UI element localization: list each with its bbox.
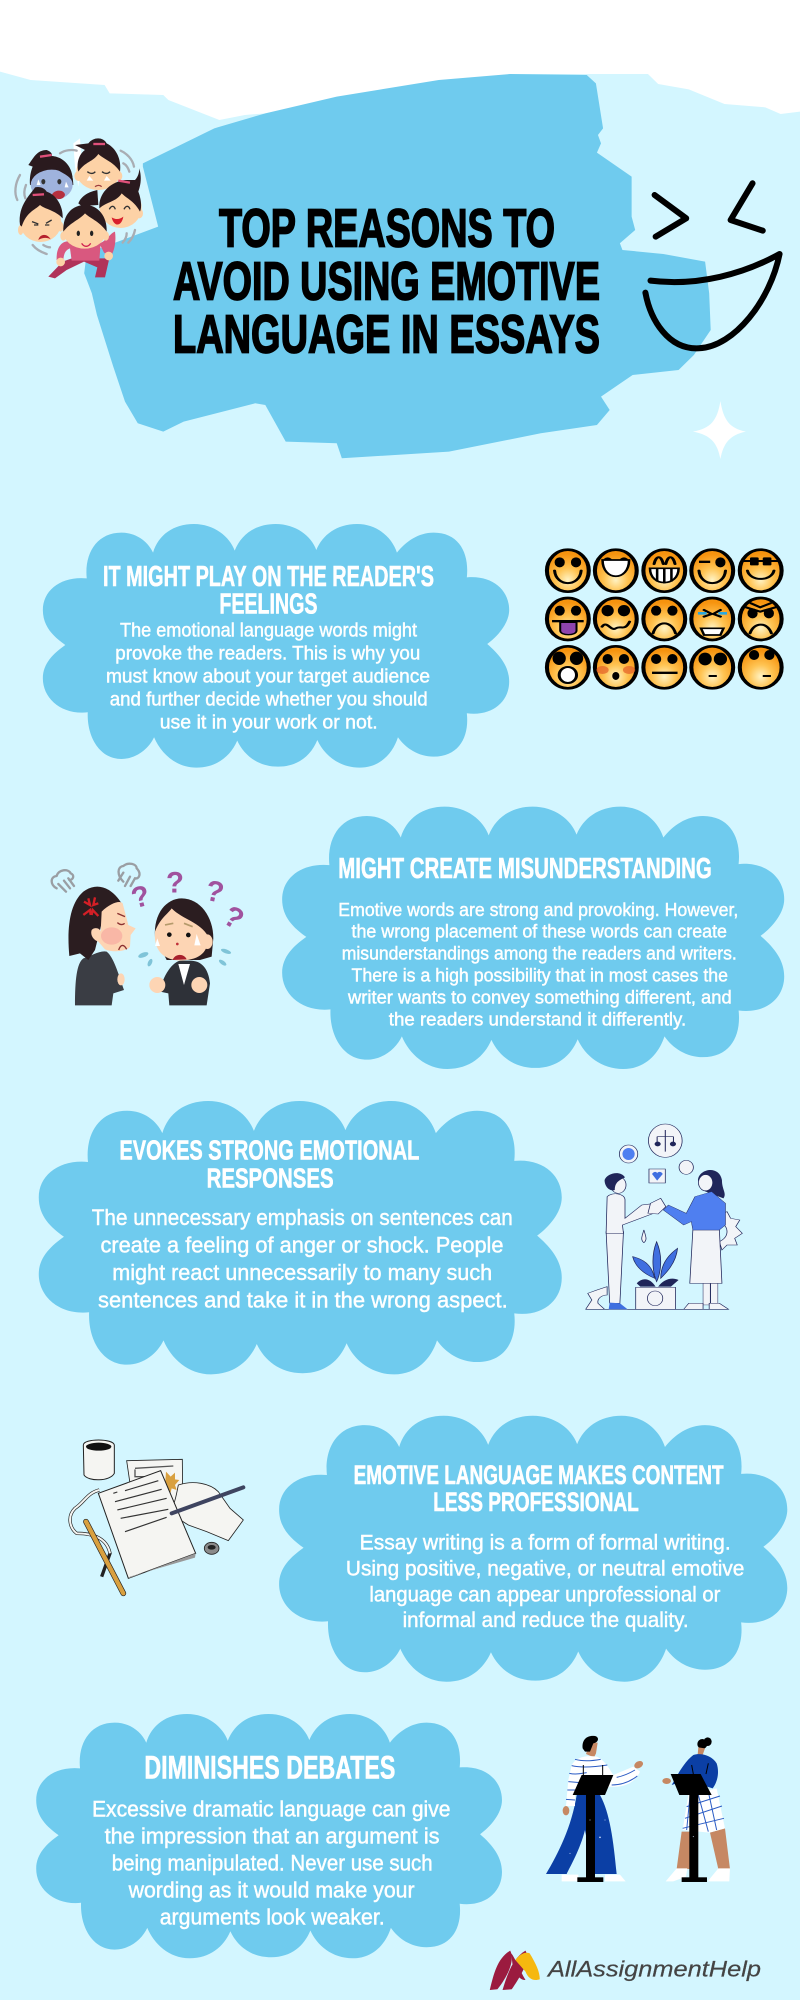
- heading: [119, 1134, 419, 1193]
- ring: [204, 1542, 219, 1554]
- icon: angry woman and worried woman: [52, 864, 250, 1005]
- icon: white sparkle: [693, 401, 746, 459]
- top woman: [76, 153, 120, 190]
- body text: sentences and take it in the wrong aspect.: [98, 1288, 508, 1313]
- panel: emotive language makes content less professional: [279, 1416, 787, 1682]
- body text: [92, 1797, 450, 1930]
- centre woman: [48, 258, 109, 278]
- heading: DIMINISHES DEBATES: [144, 1749, 395, 1785]
- heading: [354, 1460, 724, 1517]
- question marks: ?: [128, 879, 153, 915]
- scale icon: [648, 1124, 682, 1157]
- body text: the wrong placement of these words can create: [352, 921, 727, 942]
- pen: [172, 1487, 243, 1513]
- title: AVOID USING EMOTIVE: [173, 252, 600, 312]
- body text: the readers understand it differently.: [389, 1008, 686, 1029]
- left woman: [20, 203, 61, 242]
- cloud background: [39, 1101, 562, 1374]
- logo mark: [490, 1951, 540, 1990]
- strap: [70, 1490, 110, 1577]
- body text: provoke the readers. This is why you: [115, 643, 420, 665]
- cup: [83, 1440, 114, 1480]
- body text: wording as it would make your: [128, 1878, 415, 1903]
- panel: diminishes debates: [36, 1714, 502, 1958]
- panel: might create misunderstanding: [282, 807, 784, 1069]
- cloud background: [282, 807, 784, 1069]
- title: [173, 198, 600, 364]
- body text: misunderstandings among the readers and writers.: [342, 943, 737, 964]
- cloud background: [36, 1714, 502, 1958]
- body text: [92, 1205, 513, 1313]
- man: [606, 1232, 623, 1303]
- glove hand: [170, 1483, 243, 1541]
- angry woman: [75, 951, 124, 1005]
- pencil: [86, 1522, 123, 1593]
- question marks: ?: [217, 899, 250, 937]
- man: [586, 1743, 598, 1757]
- woman: [698, 1170, 725, 1198]
- panel: it might play on the reader's feelings: [43, 524, 509, 768]
- body text: Emotive words are strong and provoking. However,: [338, 899, 738, 920]
- body text: use it in your work or not.: [160, 712, 378, 734]
- icon: grid of emoticon faces: [547, 550, 782, 688]
- plant: [636, 1287, 676, 1309]
- body text: [346, 1532, 744, 1632]
- body text: informal and reduce the quality.: [403, 1609, 689, 1632]
- heading: EVOKES STRONG EMOTIONAL: [119, 1134, 419, 1165]
- panel: evokes strong emotional responses: [39, 1101, 562, 1374]
- body text: Excessive dramatic language can give: [92, 1797, 450, 1822]
- cloud background: [43, 524, 509, 768]
- body text: [106, 620, 430, 734]
- blue woman: [28, 150, 73, 185]
- body text: There is a high possibility that in most cases the: [352, 965, 728, 986]
- body text: might react unnecessarily to many such: [112, 1260, 492, 1285]
- icon: two people shaking hands with plant: [586, 1124, 742, 1309]
- heart bubble: [649, 1169, 665, 1183]
- body text: arguments look weaker.: [160, 1905, 385, 1930]
- body text: language can appear unprofessional or: [369, 1583, 720, 1606]
- icon: laughing face doodle: [645, 183, 780, 348]
- body text: The unnecessary emphasis on sentences can: [92, 1205, 513, 1230]
- heading: FEELINGS: [219, 588, 317, 620]
- question marks: ?: [166, 867, 184, 900]
- title: TOP REASONS TO: [219, 198, 555, 258]
- body text: [338, 899, 738, 1029]
- body text: Essay writing is a form of formal writing.: [360, 1532, 731, 1555]
- back paper: [127, 1459, 183, 1507]
- heading: RESPONSES: [207, 1162, 334, 1193]
- question marks: [128, 867, 250, 937]
- notebook: [98, 1471, 196, 1578]
- body text: must know about your target audience: [106, 666, 430, 688]
- logo: AllAssignmentHelp: [490, 1951, 761, 1990]
- gears: [719, 1212, 742, 1250]
- body text: The emotional language words might: [120, 620, 418, 642]
- heading: [103, 561, 434, 620]
- icon: group of emotional women: [15, 138, 143, 278]
- clock: [679, 1160, 693, 1174]
- heading: LESS PROFESSIONAL: [433, 1487, 639, 1517]
- cloud background: [279, 1416, 787, 1682]
- question marks: ?: [203, 874, 227, 910]
- heading: IT MIGHT PLAY ON THE READER'S: [103, 561, 434, 593]
- woman: [704, 1737, 712, 1746]
- icon: notebook, coffee, pen and pencil: [70, 1440, 243, 1593]
- target icon: [619, 1145, 638, 1163]
- body text: writer wants to convey something different, and: [347, 987, 732, 1008]
- title: LANGUAGE IN ESSAYS: [173, 304, 600, 364]
- icon: two debaters at lecterns: [546, 1736, 730, 1882]
- smoke puffs: [52, 864, 139, 892]
- worried woman: [155, 898, 213, 960]
- logo text: AllAssignmentHelp: [546, 1956, 761, 1982]
- body text: being manipulated. Never use such: [112, 1851, 433, 1876]
- body text: and further decide whether you should: [110, 689, 428, 711]
- body text: the impression that an argument is: [105, 1824, 440, 1849]
- ponytail behind centre woman: [78, 190, 98, 206]
- torn white paper strip at top: [0, 0, 800, 120]
- right woman: [100, 187, 142, 228]
- star stamp: [165, 1472, 179, 1495]
- body text: Using positive, negative, or neutral emotive: [346, 1557, 744, 1580]
- hero brush blob: [84, 74, 711, 458]
- body text: create a feeling of anger or shock. People: [100, 1233, 504, 1258]
